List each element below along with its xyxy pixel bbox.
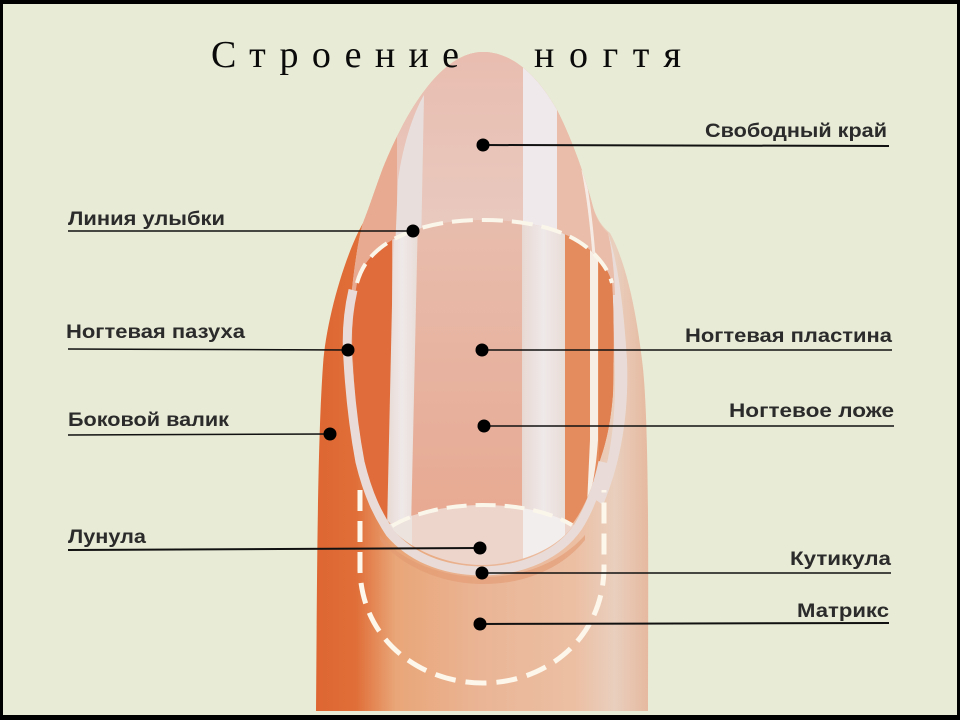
nail bed	[352, 220, 614, 524]
lunula	[390, 505, 574, 565]
label: Ногтевая пластина	[476, 325, 892, 356]
label: Свободный край: Свободный край	[705, 120, 887, 142]
label: Лунула	[68, 526, 486, 554]
label: Ногтевая пазуха: Ногтевая пазуха	[66, 321, 245, 343]
lunula dashed arc	[392, 505, 572, 526]
label: Матрикс	[474, 600, 889, 630]
dashed matrix outline	[360, 490, 604, 683]
label: Ногтевая пазуха	[66, 321, 354, 356]
label: Линия улыбки	[68, 208, 420, 238]
right side light band	[596, 233, 627, 505]
label: Ногтевое ложе	[478, 400, 894, 432]
label: Ногтевое ложе: Ногтевое ложе	[729, 400, 894, 422]
cuticle fold shadow	[380, 535, 585, 584]
label: Матрикс: Матрикс	[797, 600, 889, 622]
dashed nail bed top	[357, 220, 612, 283]
title: Строение	[211, 34, 459, 76]
free edge of the nail	[345, 45, 620, 300]
label: Лунула: Лунула	[68, 526, 146, 548]
label: Ногтевая пластина: Ногтевая пластина	[685, 325, 892, 347]
label: Боковой валик	[68, 409, 336, 440]
label: Кутикула	[476, 548, 891, 580]
nail fold rim	[347, 290, 603, 571]
label: Кутикула: Кутикула	[790, 548, 891, 570]
label: Свободный край	[476, 120, 889, 152]
illustration: finger with nail	[316, 45, 648, 711]
title	[211, 34, 681, 76]
thin white highlight	[583, 170, 595, 270]
label: Линия улыбки: Линия улыбки	[68, 208, 225, 230]
label: Боковой валик: Боковой валик	[68, 409, 229, 431]
title: ногтя	[534, 34, 681, 76]
finger skin	[316, 52, 648, 711]
